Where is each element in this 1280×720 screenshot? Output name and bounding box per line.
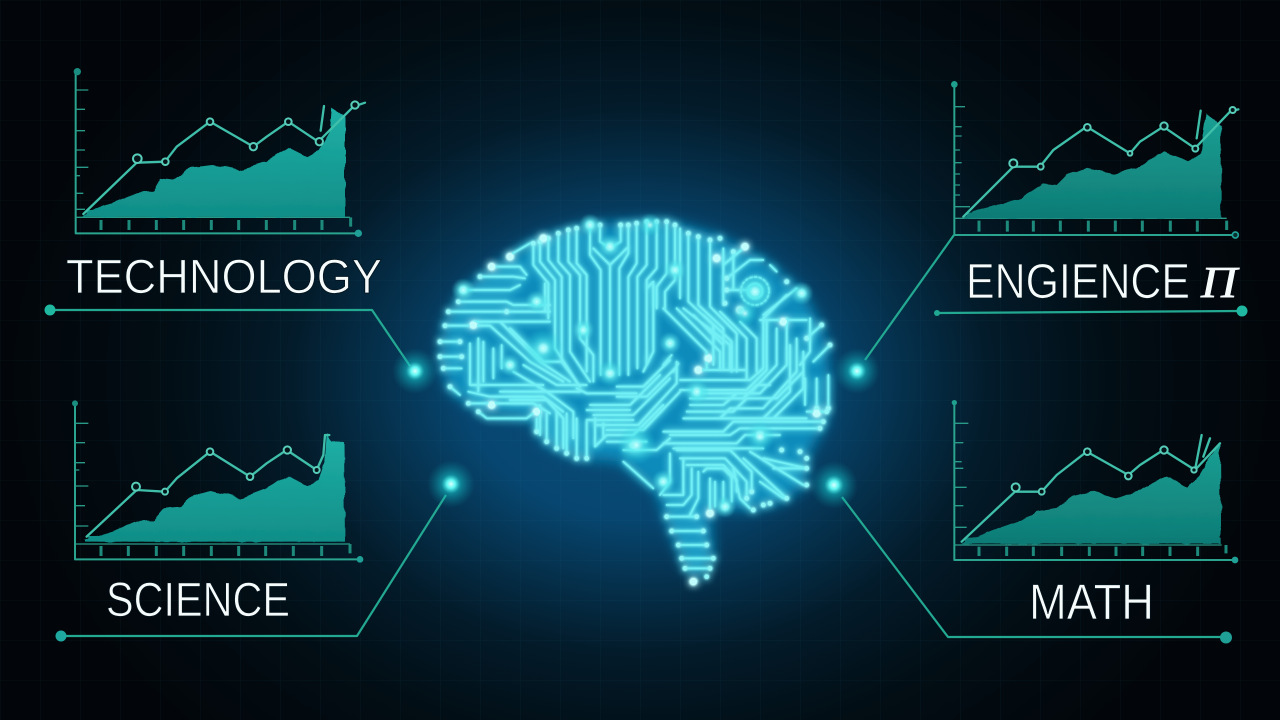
glow node: engineering <box>834 348 880 394</box>
brain silhouette glow <box>440 220 830 582</box>
panel: math chart <box>952 400 1238 563</box>
label: math: MATH <box>1029 574 1154 630</box>
connector: engineering <box>865 235 1248 360</box>
circuit traces <box>440 222 830 582</box>
connector: technology <box>44 304 410 366</box>
label: engineering: Π <box>1200 258 1240 307</box>
label: science: SCIENCE <box>106 574 290 627</box>
glow node: math <box>810 461 858 509</box>
hot spots <box>451 213 814 518</box>
panel: science chart <box>72 400 363 563</box>
label: engineering: ENGIENCE <box>966 255 1190 309</box>
brain circuit <box>440 213 830 582</box>
connector: science <box>56 495 446 642</box>
panel: engineering chart <box>951 81 1238 238</box>
panel: technology chart <box>74 68 365 237</box>
connector: math <box>842 497 1232 644</box>
glow node: science <box>427 460 475 508</box>
glow node: technology <box>392 348 438 394</box>
label: technology: TECHNOLOGY <box>66 251 382 304</box>
